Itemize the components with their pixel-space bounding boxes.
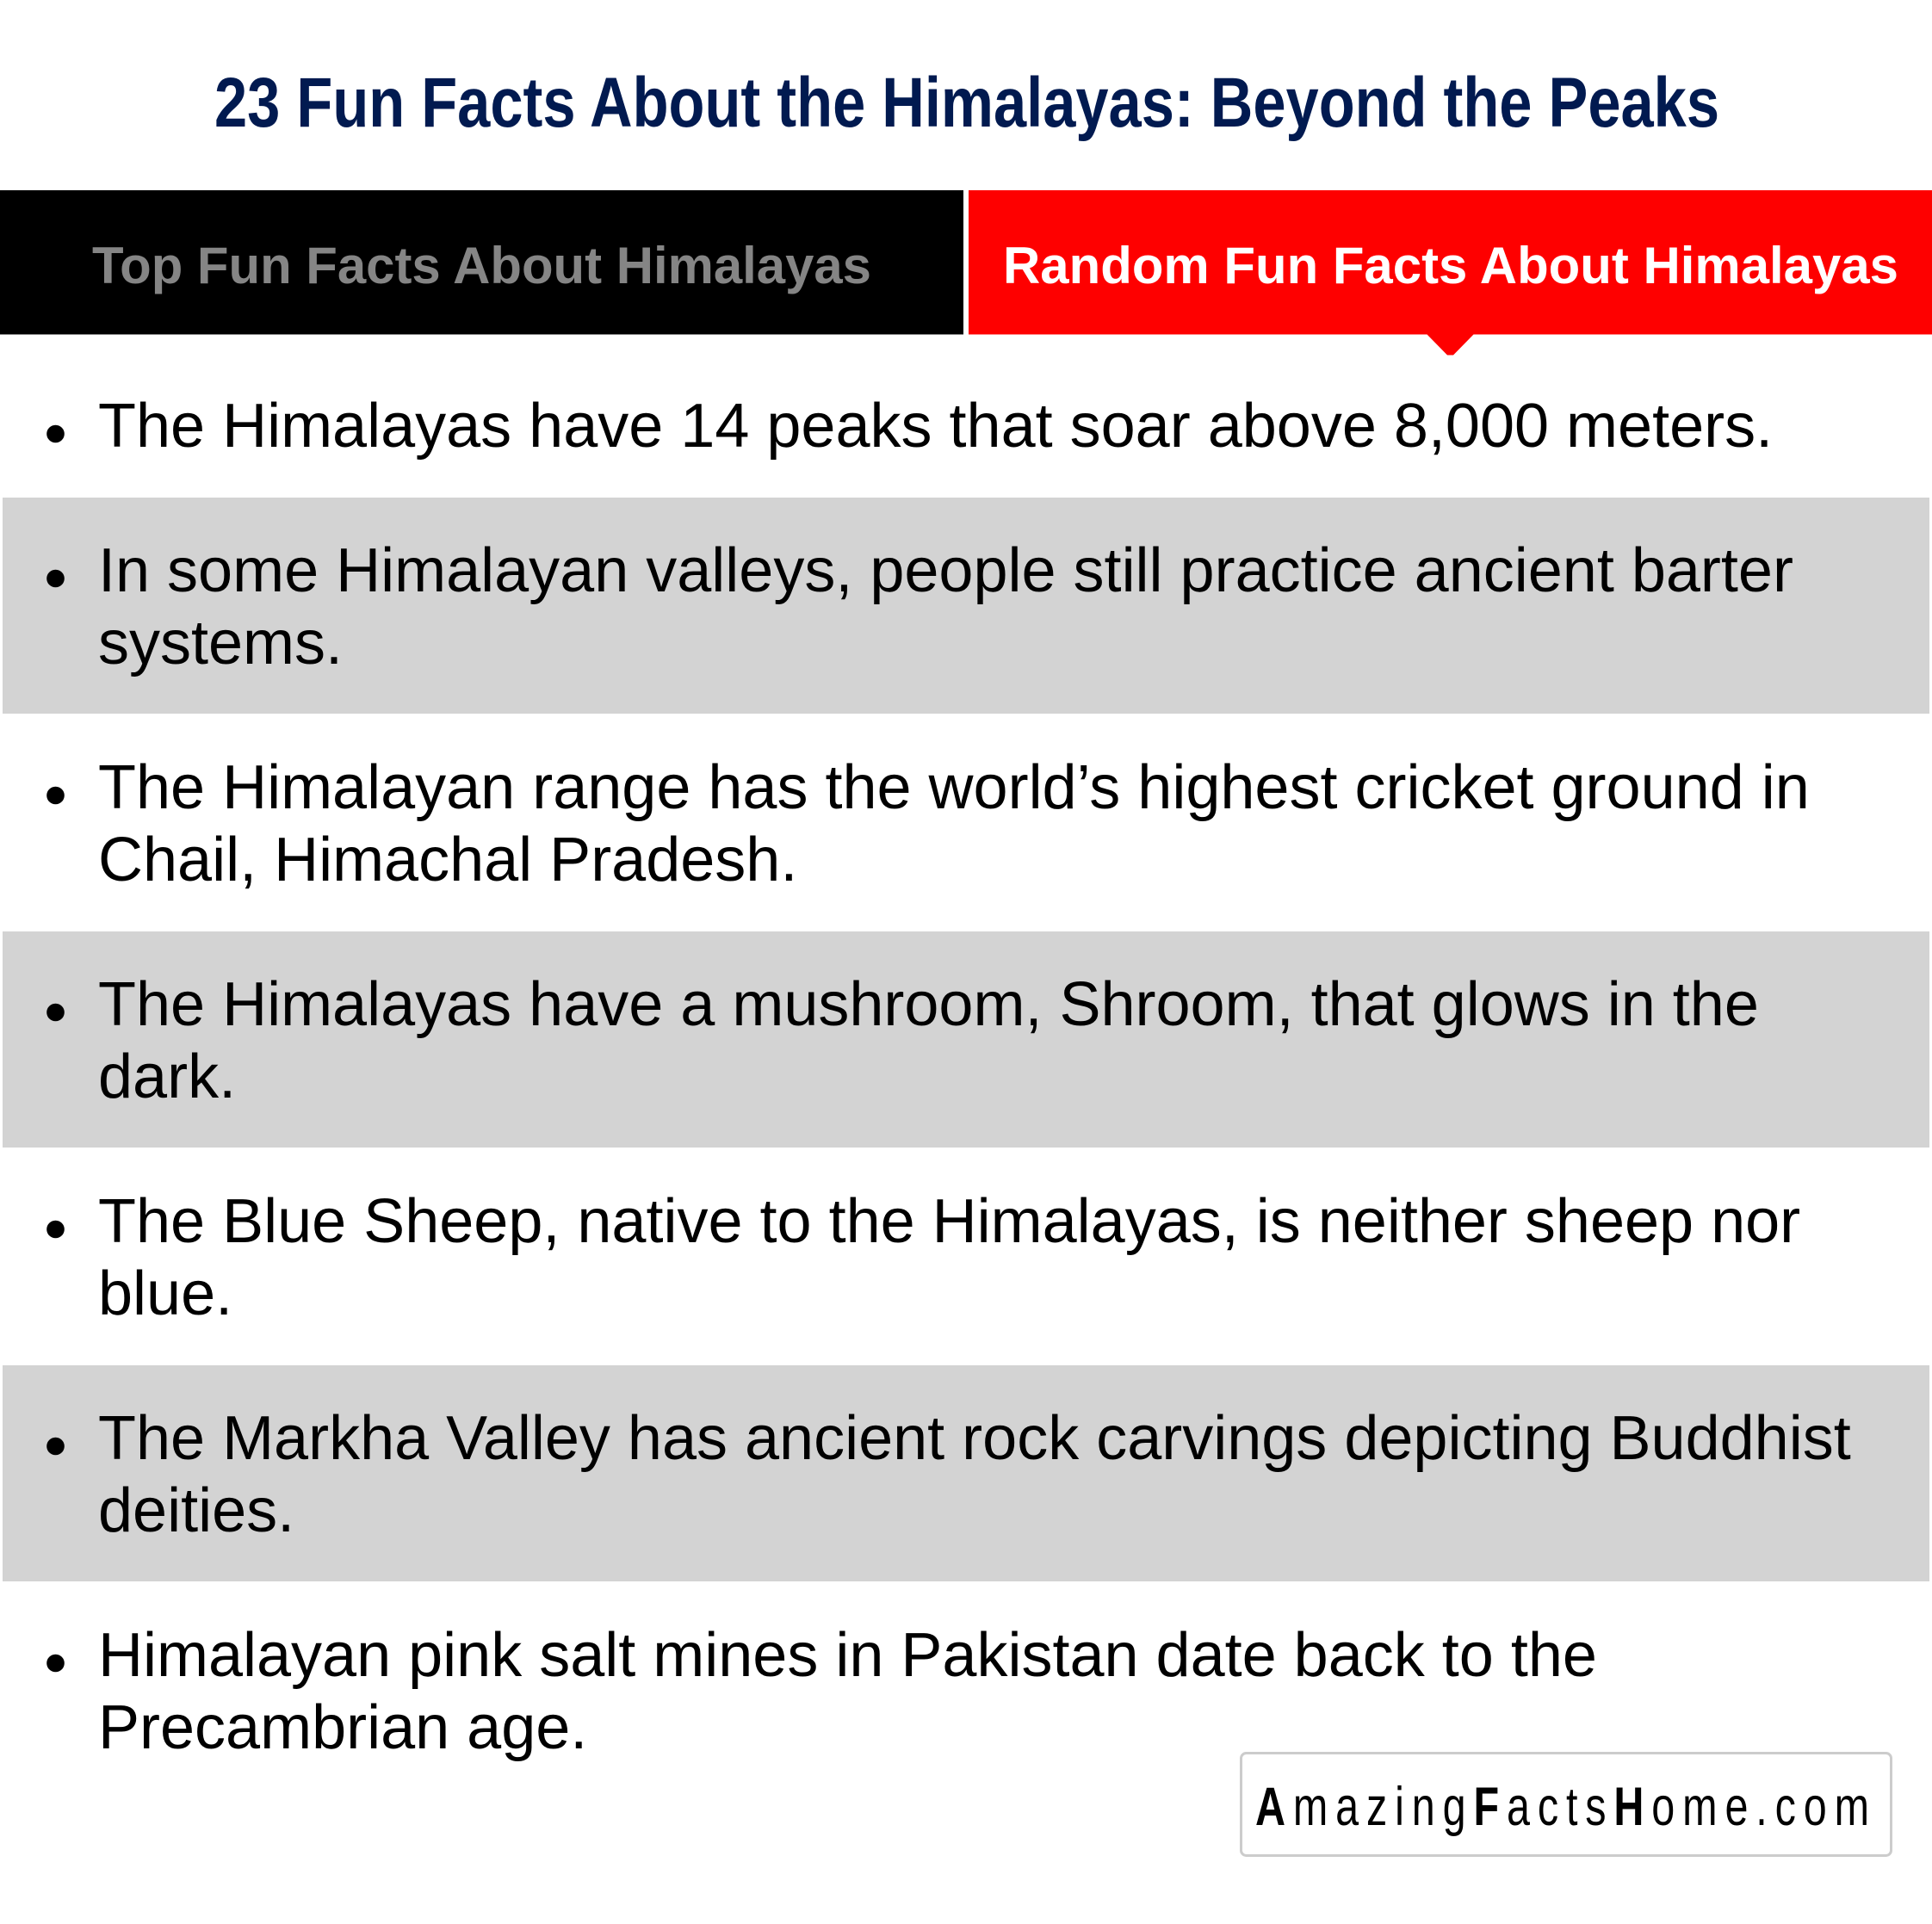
fact 6: deities. xyxy=(98,1476,294,1545)
fact 3: Chail, Himachal Pradesh. xyxy=(98,826,797,894)
fact 5 xyxy=(46,1187,1800,1328)
fact 7 xyxy=(46,1621,1597,1762)
fact 7: Himalayan pink salt mines in Pakistan date back to the xyxy=(98,1621,1597,1690)
watermark xyxy=(1242,1753,1891,1856)
fact 5: blue. xyxy=(98,1259,232,1328)
fact 4 xyxy=(3,931,1929,1148)
fact 6 xyxy=(3,1365,1929,1581)
fact 2: systems. xyxy=(98,609,343,677)
fact 6: The Markha Valley has ancient rock carvings depicting Buddhist xyxy=(98,1404,1851,1473)
fact 5: The Blue Sheep, native to the Himalayas, is neither sheep nor xyxy=(98,1187,1800,1256)
fact 7: Precambrian age. xyxy=(98,1693,587,1762)
fact 3: The Himalayan range has the world’s highest cricket ground in xyxy=(98,753,1810,822)
tab: top fun facts xyxy=(0,190,963,334)
fact 2 xyxy=(3,498,1929,714)
fact 1: The Himalayas have 14 peaks that soar above 8,000 meters. xyxy=(98,392,1773,461)
fact 2: In some Himalayan valleys, people still practice ancient barter xyxy=(98,536,1793,605)
tab: random fun facts (active) xyxy=(969,190,1932,355)
fact 3 xyxy=(46,753,1810,894)
watermark: AmazingFactsHome.com xyxy=(1255,1776,1869,1836)
fact 4: The Himalayas have a mushroom, Shroom, that glows in the xyxy=(98,970,1759,1039)
tab: top fun facts: Top Fun Facts About Himalayas xyxy=(92,237,871,294)
fact 4: dark. xyxy=(98,1042,236,1111)
tab: random fun facts (active): Random Fun Facts About Himalayas xyxy=(1003,237,1898,294)
